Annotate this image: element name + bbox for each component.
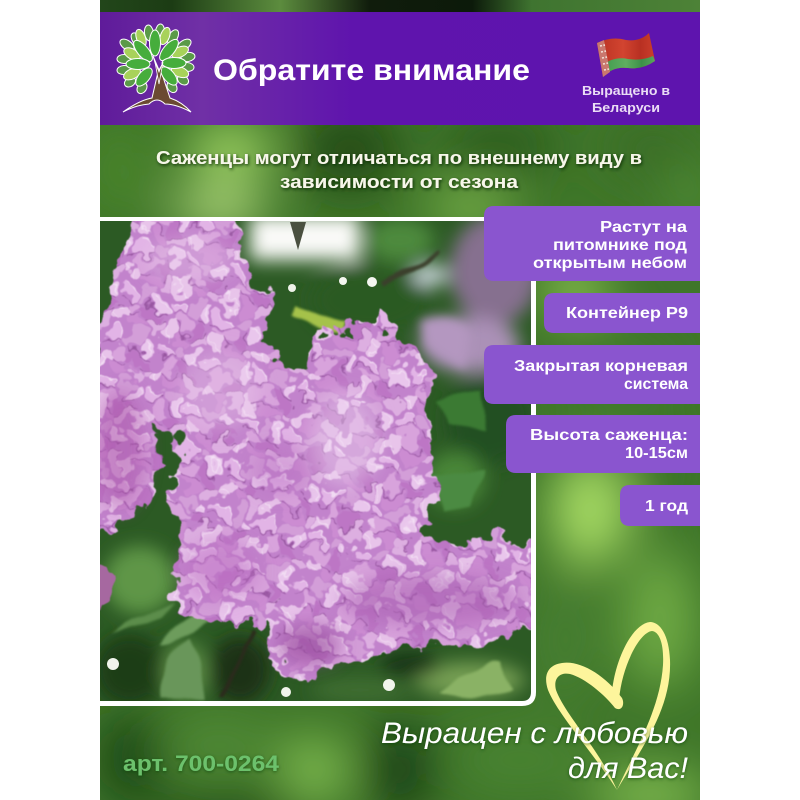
pill: root system [484, 345, 700, 404]
header band [100, 12, 700, 125]
flag caption: Выращено в [582, 83, 670, 98]
back-left panicle [100, 215, 290, 430]
logo: tree [117, 24, 196, 112]
pill: age [620, 485, 700, 526]
left panicle [100, 385, 166, 536]
subtitle note: Саженцы могут отличаться по внешнему виду в [156, 148, 642, 168]
photo: lilac blossoms [90, 215, 540, 706]
icon: yellow heart [546, 622, 670, 790]
main panicle [150, 312, 540, 685]
flower panicles [90, 215, 540, 685]
article number: арт. 700-0264 [123, 751, 280, 776]
slogan [381, 717, 689, 785]
slogan: Выращен с любовью [381, 717, 688, 750]
pill: open-field: питомнике под [553, 237, 687, 254]
flag caption [582, 83, 670, 115]
icon: Belarus flag [597, 33, 655, 77]
slogan: для Вас! [568, 752, 689, 785]
foliage details [110, 250, 515, 700]
title: Обратите внимание [213, 54, 530, 87]
subtitle note: зависимости от сезона [280, 172, 519, 192]
blurred back panicle [420, 317, 470, 370]
pill: container [544, 293, 700, 333]
pill: height: 10-15см [625, 445, 688, 462]
flag caption: Беларуси [592, 100, 660, 115]
pill: root system: Закрытая корневая [514, 358, 688, 375]
pill: height [506, 415, 700, 473]
pill: age: 1 год [645, 498, 688, 515]
pill: open-field: открытым небом [533, 255, 687, 272]
subtitle note [156, 148, 642, 192]
shading on panicles [94, 236, 520, 665]
pill: height: Высота саженца: [530, 427, 688, 444]
pill: open-field [484, 206, 700, 281]
photo frame [100, 217, 536, 706]
pill: root system: система [624, 376, 688, 393]
pill: container: Контейнер Р9 [566, 305, 688, 322]
pill: open-field: Растут на [600, 219, 687, 236]
green blurred background [90, 0, 714, 800]
